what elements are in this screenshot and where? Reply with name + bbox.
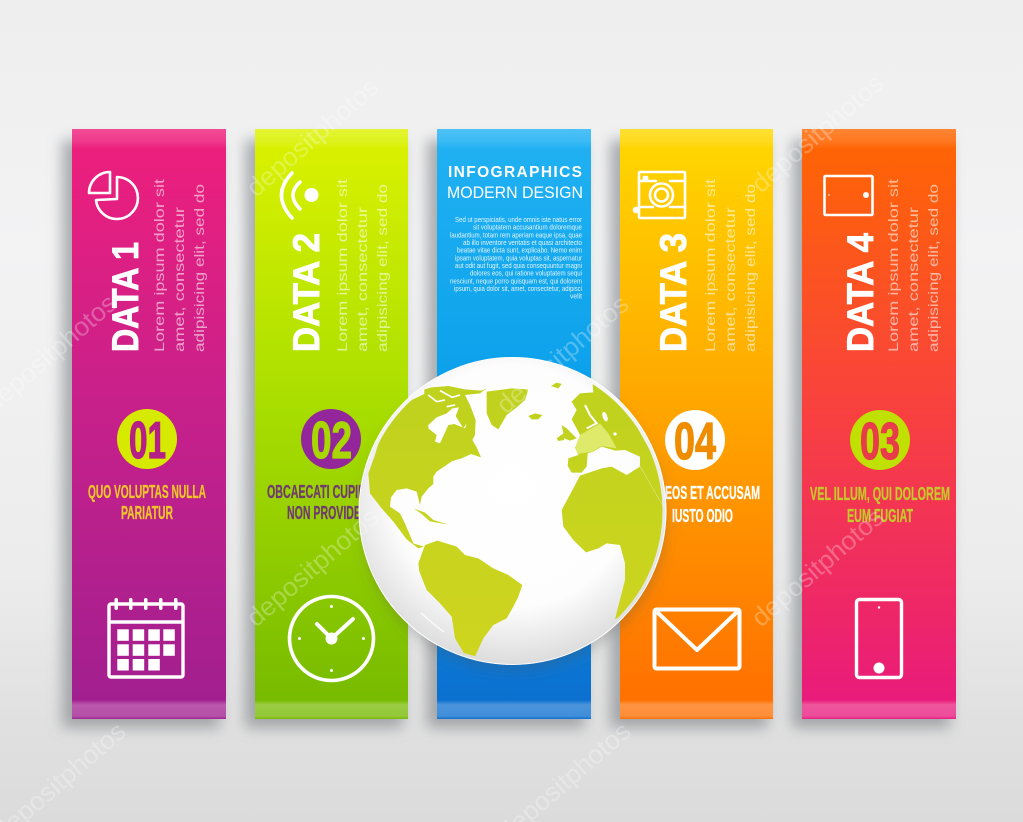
africa xyxy=(562,467,667,619)
label: obcaecati xyxy=(267,482,395,523)
text: paragraph: ab illo inventore veritatis et quasi architecto xyxy=(463,238,582,247)
text: paragraph: laudantium, totam rem aperiam eaque ipsa, quae xyxy=(450,230,582,239)
panel: data 1 xyxy=(72,129,226,719)
text: lorem data 3: amet, consectetur xyxy=(722,207,738,352)
panel: data 4 xyxy=(802,129,956,719)
globe shadow xyxy=(362,370,666,670)
text: lorem data 4: adipisicing elit, sed do xyxy=(925,184,941,352)
label: obcaecati: OBCAECATI CUPIDITATE xyxy=(267,482,395,502)
svalbard xyxy=(551,383,562,388)
icon: wifi signal xyxy=(282,173,318,218)
heading: data 2: DATA 2 xyxy=(286,233,327,352)
watermarks: depositphotos xyxy=(745,68,889,199)
text: paragraph xyxy=(450,215,582,301)
text: lorem data 2: adipisicing elit, sed do xyxy=(374,184,390,352)
panel: infographics title xyxy=(437,129,591,719)
baltic and lakes xyxy=(585,405,617,436)
watermarks xyxy=(0,68,889,822)
label: vel illum xyxy=(810,484,950,526)
arctic channels xyxy=(428,391,460,407)
text: lorem data 1: Lorem ipsum dolor sit xyxy=(151,179,167,352)
greenland xyxy=(487,388,528,429)
watermarks: depositphotos xyxy=(745,502,889,633)
watermarks: depositphotos xyxy=(490,289,634,420)
text: paragraph: ipsam voluptatem, quia voluptas sit, aspernatur xyxy=(455,253,582,262)
label: quo voluptas xyxy=(88,482,206,523)
text: paragraph: dolores eos, qui ratione voluptatem sequi xyxy=(470,269,582,278)
watermarks: depositphotos xyxy=(240,502,384,633)
text: lorem data 4 xyxy=(885,179,941,352)
heading: data 4: DATA 4 xyxy=(840,233,881,352)
badge: 02: 02 xyxy=(311,412,352,470)
text: lorem data 3: adipisicing elit, sed do xyxy=(742,184,758,352)
heading: data 3: DATA 3 xyxy=(653,233,694,352)
label: quo voluptas: PARIATUR xyxy=(121,503,173,523)
text: paragraph: sit voluptatem accusantium doloremque xyxy=(473,223,582,232)
text: paragraph: velit xyxy=(570,292,582,301)
text: lorem data 2: amet, consectetur xyxy=(354,207,370,352)
globe highlight xyxy=(421,613,444,632)
north america xyxy=(368,386,487,548)
text: paragraph: aut odit aut fugit, sed quia consequuntur magni xyxy=(455,261,582,270)
icon: pie chart xyxy=(89,172,138,219)
text: lorem data 2 xyxy=(334,179,390,352)
heading: data 1: DATA 1 xyxy=(105,242,146,352)
text: paragraph: beatae vitae dicta sunt, explicabo. Nemo enim xyxy=(457,246,582,255)
badge: 04: 04 xyxy=(674,413,716,471)
label: vel illum: EUM FUGIAT xyxy=(847,506,913,526)
label: eos et accusam: EOS ET ACCUSAM xyxy=(665,483,760,503)
panel: data 3 xyxy=(620,129,773,719)
text: lorem data 1: amet, consectetur xyxy=(171,207,187,352)
icon: camera xyxy=(634,172,685,218)
text: lorem data 2: Lorem ipsum dolor sit xyxy=(334,179,350,352)
icon: clock xyxy=(290,596,374,680)
icon: calendar xyxy=(109,598,183,677)
hudson bay xyxy=(428,407,467,443)
iceland xyxy=(528,413,542,419)
text: lorem data 3 xyxy=(702,179,758,352)
map: continents xyxy=(368,381,667,657)
text: lorem data 1 xyxy=(151,179,207,352)
globe xyxy=(359,358,667,664)
label: obcaecati: NON PROVIDENT xyxy=(287,503,375,523)
badge: 01 xyxy=(117,409,177,470)
icon: smartphone xyxy=(856,600,902,678)
britain xyxy=(557,425,577,441)
icon: tablet xyxy=(824,176,872,215)
cuba and antilles xyxy=(414,509,448,525)
text: lorem data 4: Lorem ipsum dolor sit xyxy=(885,179,901,352)
south america xyxy=(418,541,522,657)
heading: modern design: MODERN DESIGN xyxy=(447,184,583,202)
text: lorem data 3: Lorem ipsum dolor sit xyxy=(702,179,718,352)
badge: 03: 03 xyxy=(860,413,900,471)
panel shadows xyxy=(62,140,950,728)
label: eos et accusam: IUSTO ODIO xyxy=(672,506,733,526)
text: paragraph: Sed ut perspiciatis, unde omnis iste natus error xyxy=(455,215,582,224)
text: lorem data 4: amet, consectetur xyxy=(905,207,921,352)
europe highlight xyxy=(575,423,617,454)
label: eos et accusam xyxy=(665,483,760,526)
panel: data 2 xyxy=(255,129,408,719)
badge: 01: 01 xyxy=(129,412,166,470)
icon: envelope xyxy=(654,610,740,668)
heading: infographics: INFOGRAPHICS xyxy=(448,164,582,181)
text: lorem data 1: adipisicing elit, sed do xyxy=(191,184,207,352)
text: paragraph: nesciunt, neque porro quisquam est, qui dolorem xyxy=(450,276,582,285)
label: quo voluptas: QUO VOLUPTAS NULLA xyxy=(88,482,206,502)
watermarks: depositphotos xyxy=(240,72,384,203)
text: paragraph: ipsum, quia dolor sit, amet, consectetur, adipisci xyxy=(454,284,582,293)
eurasia xyxy=(568,384,662,504)
